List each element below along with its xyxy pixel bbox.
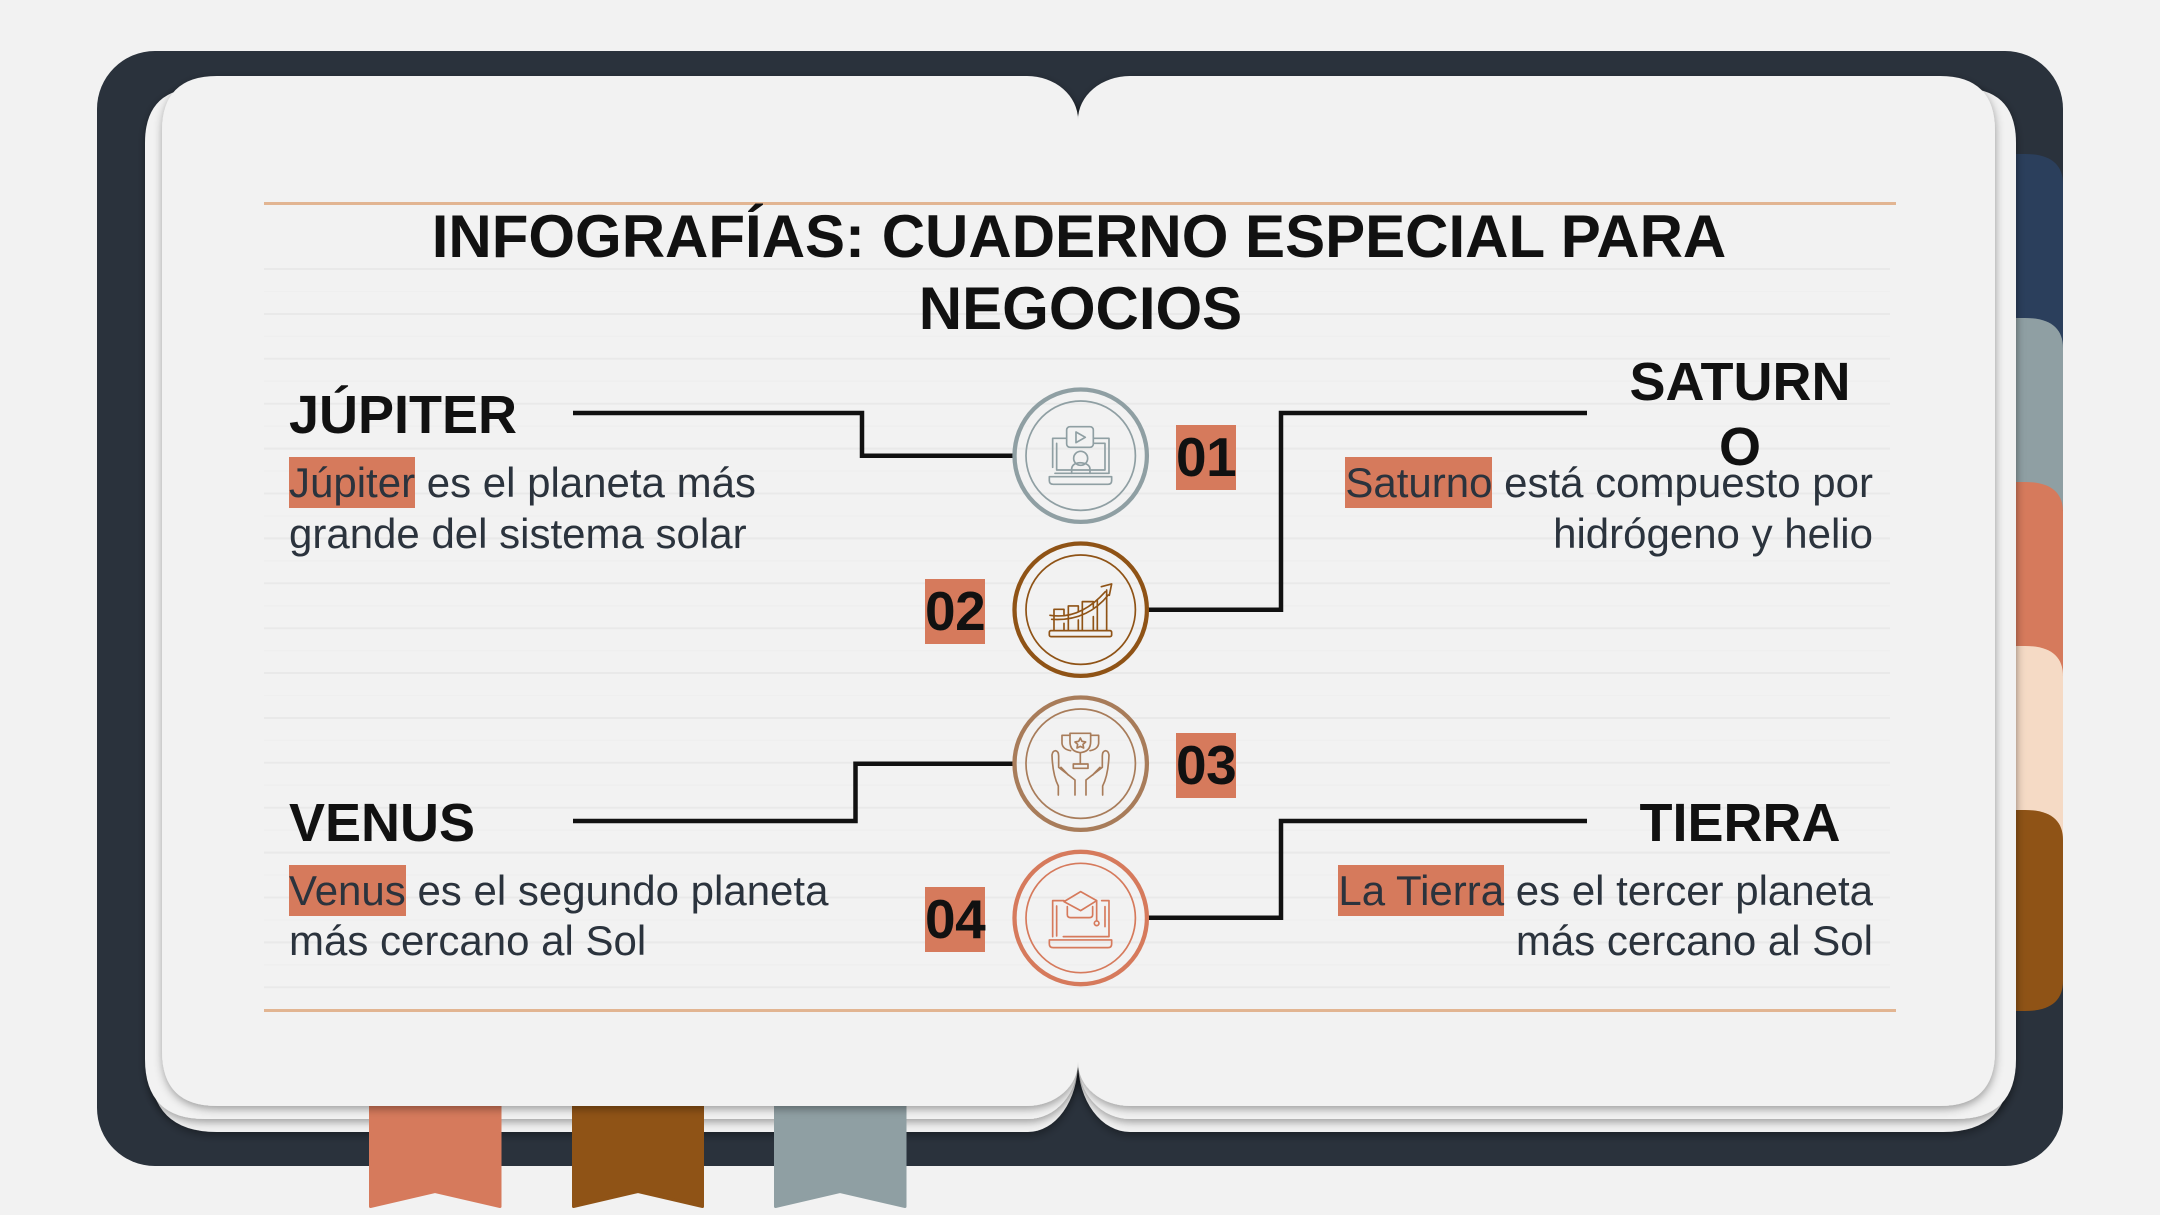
heading: Saturno: SATURNO — [1630, 352, 1850, 477]
number 01: 01 — [1176, 426, 1236, 488]
text: Saturno: Saturno está compuesto por — [1345, 459, 1873, 506]
text: Tierra: La Tierra es el tercer planeta — [1338, 866, 1873, 914]
text: Tierra: más cercano al Sol — [1516, 917, 1873, 964]
text: Saturno — [1345, 457, 1873, 557]
heading: Venus: VENUS — [289, 793, 475, 853]
icon 03: trophy and hands — [1014, 698, 1147, 830]
text: Venus — [289, 865, 828, 964]
page rule top — [264, 202, 1896, 205]
bookmarks — [370, 1100, 905, 1206]
icon 01: video lesson — [1014, 390, 1147, 522]
text: Tierra — [1338, 865, 1873, 964]
icon 04: graduation laptop — [1014, 852, 1147, 984]
icon 02: growth chart — [1014, 544, 1147, 676]
number 04: 04 — [925, 888, 985, 950]
heading: Júpiter: JÚPITER — [289, 385, 517, 445]
top page spread — [162, 76, 1995, 1106]
heading: Tierra: TIERRA — [1640, 793, 1840, 853]
number 03: 03 — [1176, 734, 1236, 796]
lower page layers — [145, 88, 2016, 1132]
connector lines — [573, 413, 1587, 918]
text: Venus: más cercano al Sol — [289, 917, 646, 964]
text: Venus: Venus es el segundo planeta — [289, 866, 828, 914]
page rule bottom — [264, 1009, 1896, 1012]
title: INFOGRAFÍAS: CUADERNO ESPECIAL PARA NEGOCIOS — [432, 203, 1726, 342]
index tabs — [2000, 154, 2063, 1011]
number 02: 02 — [925, 580, 985, 642]
text: Saturno: hidrógeno y helio — [1553, 510, 1873, 557]
text: Júpiter: grande del sistema solar — [289, 510, 747, 557]
text: Júpiter — [289, 457, 756, 557]
text: Júpiter: Júpiter es el planeta más — [289, 459, 756, 506]
